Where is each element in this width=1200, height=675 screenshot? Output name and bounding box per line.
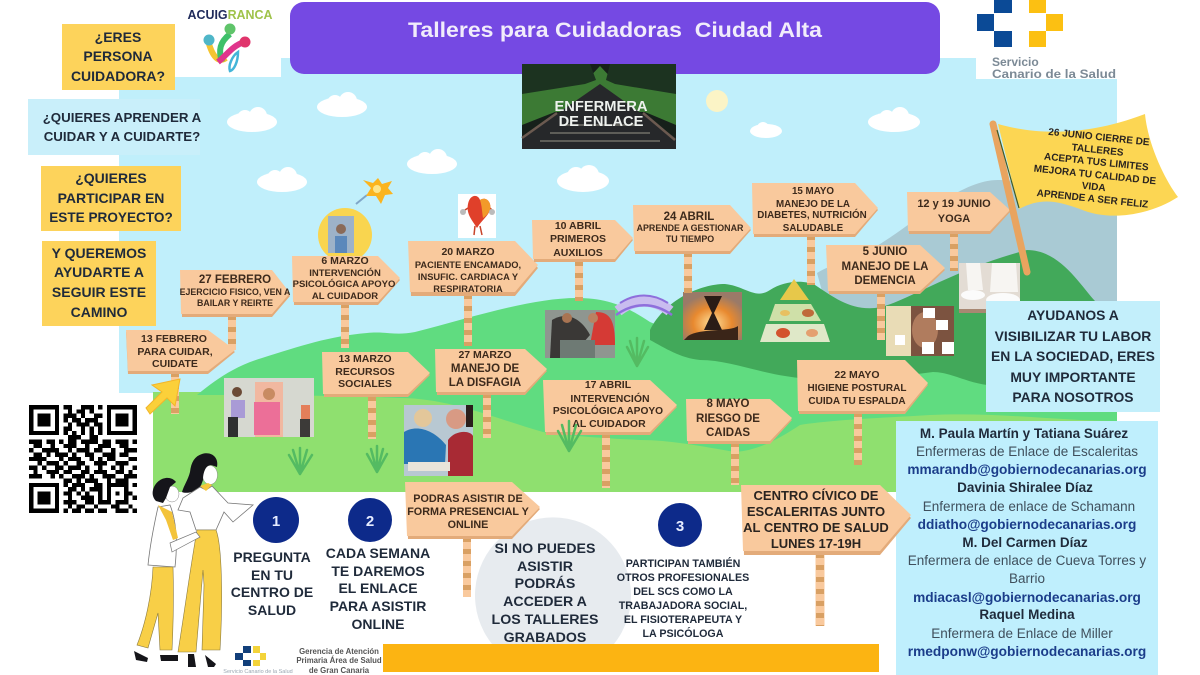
- flag: 26 junio: ACEPTA TUS LIMITES: [1043, 152, 1149, 174]
- step 3: number badge and text: PARTICIPAN TAMBIÉN: [626, 557, 740, 570]
- signpost: 13 marzo: RECURSOS: [335, 366, 395, 378]
- signpost: podras asistir: ONLINE: [448, 519, 488, 531]
- signpost: 5 junio: [826, 245, 945, 340]
- panel: visibilizar: EN LA SOCIEDAD, ERES: [991, 348, 1155, 364]
- signpost: 8 mayo: [686, 398, 792, 485]
- step 3: number badge and text: DEL SCS COMO LA: [633, 586, 733, 598]
- step 2: number badge and text: [326, 498, 430, 632]
- question box: queremos ayudarte: [42, 241, 156, 326]
- arrow: yellow start arrow: [146, 379, 180, 414]
- signpost: 24 abril: APRENDE A GESTIONAR: [637, 223, 744, 233]
- panel: contacts: M. Del Carmen Díaz: [962, 535, 1088, 550]
- signpost: 20 marzo: RESPIRATORIA: [433, 284, 503, 294]
- icon: brain burst above sign: [318, 178, 393, 262]
- step 1: number badge and text: SALUD: [248, 602, 296, 618]
- signpost: 27 febrero: 27 FEBRERO: [199, 274, 271, 286]
- step 2: number badge and text: ONLINE: [352, 616, 404, 632]
- logo: Servicio Canario de la Salud: Servicio: [992, 55, 1039, 69]
- step 1: number badge and text: EN TU: [251, 567, 293, 583]
- text: gerencia de atencion primaria: [296, 647, 382, 675]
- grey circle with recorded workshops text: SI NO PUEDES: [495, 541, 595, 557]
- logo: Servicio Canario de la Salud: Canario de la Salud: [992, 67, 1116, 81]
- signpost: 15 mayo: [752, 183, 878, 285]
- panel: contacts: rmedponw@gobiernodecanarias.org: [908, 644, 1146, 659]
- signpost: podras asistir: [405, 482, 540, 597]
- signpost: centro civico: ESCALERITAS JUNTO: [747, 504, 885, 519]
- bridge: [616, 296, 672, 315]
- step 3: number badge and text: LA PSICÓLOGA: [643, 627, 724, 640]
- photo: dance class: [224, 378, 314, 437]
- question box: quieres participar: ESTE PROYECTO?: [49, 210, 173, 225]
- question box: quieres aprender: ¿QUIERES APRENDER A: [43, 110, 202, 125]
- signpost: centro civico: CENTRO CÍVICO DE: [754, 488, 879, 503]
- step 3: number badge and text: [617, 503, 749, 640]
- signpost: podras asistir: PODRAS ASISTIR DE: [413, 493, 523, 505]
- question box: quieres aprender: CUIDAR Y A CUIDARTE?: [44, 129, 200, 144]
- signpost: 8 mayo: CAIDAS: [706, 427, 750, 439]
- panel: contacts: mmarandb@gobiernodecanarias.org: [907, 462, 1147, 477]
- signpost: centro civico: [741, 485, 911, 626]
- panel: contacts: Enfermera de enlace de Schamann: [923, 499, 1135, 514]
- panel: contacts: [896, 421, 1158, 675]
- flag: 26 junio: APRENDE A SER FELIZ: [1036, 188, 1149, 211]
- panel: visibilizar: VISIBILIZAR TU LABOR: [995, 328, 1151, 344]
- title banner: [290, 2, 940, 74]
- grey circle with recorded workshops text: ACCEDER A: [503, 594, 587, 610]
- icon: grass plants: [289, 338, 648, 474]
- question box: eres persona cuidadora: PERSONA: [83, 48, 153, 64]
- signpost: 10 abril: PRIMEROS: [550, 233, 606, 245]
- grey circle with recorded workshops text: ASISTIR: [517, 559, 573, 575]
- step 2: number badge and text: TE DAREMOS: [331, 563, 425, 579]
- signpost: 22 mayo: [797, 360, 928, 465]
- signpost: 20 marzo: [408, 241, 538, 346]
- signpost: 13 marzo: [322, 352, 430, 439]
- step 1: number badge and text: PREGUNTA: [233, 549, 311, 565]
- signpost: 27 febrero: BAILAR Y REIRTE: [197, 298, 273, 308]
- clouds: [227, 92, 920, 192]
- flag: 26 junio: 26 JUNIO CIERRE DE: [1048, 127, 1150, 148]
- signpost: 13 febrero: PARA CUIDAR,: [137, 346, 213, 358]
- orange footer bar: [383, 644, 879, 672]
- question box: queremos ayudarte: AYUDARTE A: [54, 264, 144, 280]
- signpost: 22 mayo: CUIDA TU ESPALDA: [808, 396, 906, 407]
- grey circle with recorded workshops text: [475, 517, 631, 646]
- signpost: 15 mayo: DIABETES, NUTRICIÓN: [757, 209, 867, 221]
- signpost: 5 junio: DEMENCIA: [854, 275, 916, 287]
- signpost: 12 y 19 junio: [907, 192, 1010, 271]
- logo: small servicio canario: [223, 646, 293, 675]
- panel: contacts: Davinia Shiralee Díaz: [957, 480, 1093, 495]
- signpost: podras asistir: FORMA PRESENCIAL Y: [407, 506, 530, 518]
- question box: quieres participar: ¿QUIERES: [75, 170, 147, 186]
- step 3: number badge and text: TRABAJADORA SOCIAL,: [619, 600, 747, 612]
- step 2: number badge and text: PARA ASISTIR: [330, 598, 426, 614]
- signpost: 13 febrero: CUIDATE: [152, 358, 198, 370]
- signpost: 17 abril: [543, 379, 677, 488]
- signpost: 15 mayo: SALUDABLE: [783, 223, 844, 234]
- signpost: 17 abril: 17 ABRIL: [585, 379, 632, 391]
- signpost: 6 marzo: INTERVENCIÓN: [309, 267, 381, 279]
- panel: contacts: M. Paula Martín y Tatiana Suárez: [920, 426, 1128, 441]
- grey circle with recorded workshops text: GRABADOS: [504, 630, 586, 646]
- icon: heart character: [458, 194, 496, 238]
- qr code: [29, 405, 137, 513]
- illustration: woman and boy: [134, 453, 253, 667]
- icon: food pyramid: [760, 279, 830, 342]
- signpost: 5 junio: 5 JUNIO: [863, 246, 907, 258]
- signpost: 15 mayo: 15 MAYO: [792, 186, 834, 197]
- flag: 26 junio: TALLERES: [1071, 142, 1124, 159]
- panel: contacts: Enfermeras de Enlace de Escaleritas: [916, 444, 1138, 459]
- photo: enfermera de enlace: DE ENLACE: [559, 114, 644, 130]
- step 1: number badge and text: CENTRO DE: [231, 584, 313, 600]
- step 1: number badge and text: [231, 497, 313, 618]
- sun: [706, 90, 728, 112]
- signpost: 20 marzo: 20 MARZO: [441, 246, 495, 258]
- signpost: 22 mayo: 22 MAYO: [834, 369, 880, 381]
- signpost: 6 marzo: [292, 255, 400, 348]
- step 3: number badge and text: EL FISIOTERAPEUTA Y: [624, 614, 742, 626]
- signpost: 17 abril: PSICOLÓGICA APOYO: [553, 404, 663, 417]
- panel: contacts: Barrio: [1009, 571, 1045, 586]
- photo: yoga: [959, 263, 1020, 313]
- panel: visibilizar: MUY IMPORTANTE: [1010, 369, 1136, 385]
- signpost: 17 abril: INTERVENCIÓN: [570, 392, 650, 405]
- signpost: 20 marzo: INSUFIC. CARDIACA Y: [418, 272, 519, 282]
- signpost: 17 abril: AL CUIDADOR: [572, 418, 646, 430]
- signpost: 12 y 19 junio: 12 y 19 JUNIO: [917, 198, 991, 210]
- signpost: 6 marzo: 6 MARZO: [321, 255, 369, 267]
- step 3: number badge and text: 3: [676, 518, 684, 535]
- question box: quieres aprender: [28, 99, 202, 155]
- step 2: number badge and text: 2: [366, 513, 374, 530]
- logo: Servicio Canario de la Salud: [976, 0, 1117, 81]
- background scene: sky and hills: [119, 58, 1117, 492]
- photo: hourglass: [683, 292, 742, 340]
- signpost: 13 febrero: 13 FEBRERO: [141, 333, 207, 345]
- question box: eres persona cuidadora: CUIDADORA?: [71, 68, 165, 84]
- panel: contacts: Raquel Medina: [979, 607, 1075, 622]
- step 3: number badge and text: OTROS PROFESIONALES: [617, 572, 749, 584]
- photo: enfermera de enlace: ENFERMERA: [554, 99, 648, 115]
- question box: eres persona cuidadora: ¿ERES: [95, 29, 141, 45]
- text: gerencia de atencion primaria: de Gran Canaria: [309, 666, 370, 675]
- signpost: 8 mayo: 8 MAYO: [706, 398, 750, 410]
- flag: 26 junio: MEJORA TU CALIDAD DE: [1033, 164, 1157, 187]
- text: gerencia de atencion primaria: Primaria Área de Salud: [296, 656, 382, 665]
- question box: quieres participar: [41, 166, 181, 231]
- step 2: number badge and text: CADA SEMANA: [326, 545, 430, 561]
- step 2: number badge and text: EL ENLACE: [338, 580, 418, 596]
- signpost: 27 marzo: [435, 349, 547, 438]
- signpost: 24 abril: 24 ABRIL: [664, 211, 714, 223]
- question box: eres persona cuidadora: [62, 24, 175, 90]
- signpost: 13 marzo: SOCIALES: [338, 378, 392, 390]
- panel: contacts: mdiacasl@gobiernodecanarias.org: [913, 590, 1141, 605]
- signpost: 24 abril: TU TIEMPO: [666, 234, 714, 244]
- signpost: 24 abril: [633, 205, 751, 293]
- signpost: 6 marzo: AL CUIDADOR: [312, 291, 378, 302]
- signpost: 10 abril: AUXILIOS: [553, 247, 603, 259]
- panel: contacts: ddiatho@gobiernodecanarias.org: [918, 517, 1136, 532]
- signpost: 27 febrero: [180, 270, 291, 350]
- flag: 26 junio: VIDA: [1081, 181, 1106, 194]
- photo: first aid group: [545, 310, 615, 358]
- panel: visibilizar: [986, 301, 1160, 412]
- signpost: 27 febrero: EJERCICIO FISICO, VEN A: [180, 287, 291, 297]
- signpost: 5 junio: MANEJO DE LA: [842, 261, 928, 273]
- panel: contacts: Enfermera de Enlace de Miller: [931, 626, 1113, 641]
- question box: queremos ayudarte: CAMINO: [71, 304, 127, 320]
- signpost: 12 y 19 junio: YOGA: [938, 213, 970, 225]
- photo: puzzle portrait: [886, 306, 954, 356]
- signpost: 8 mayo: RIESGO DE: [696, 413, 760, 425]
- signpost: centro civico: LUNES 17-19H: [771, 536, 861, 551]
- logo: ACUIGRANCA: [175, 0, 281, 77]
- signpost: 6 marzo: PSICOLÓGICA APOYO: [293, 278, 395, 290]
- title banner: Talleres para Cuidadoras Ciudad Alta: [408, 19, 822, 42]
- grey circle with recorded workshops text: PODRÁS: [515, 575, 575, 592]
- question box: queremos ayudarte: Y QUEREMOS: [52, 245, 146, 261]
- signpost: 27 marzo: 27 MARZO: [458, 349, 512, 361]
- signpost: centro civico: AL CENTRO DE SALUD: [743, 520, 889, 535]
- signpost: 22 mayo: HIGIENE POSTURAL: [808, 383, 906, 394]
- signpost: 13 febrero: [126, 330, 235, 414]
- question box: queremos ayudarte: SEGUIR ESTE: [52, 284, 146, 300]
- photo: caregiver with elderly man: [404, 405, 473, 476]
- signpost: 15 mayo: MANEJO DE LA: [776, 199, 850, 210]
- panel: visibilizar: AYUDANOS A: [1027, 307, 1119, 323]
- step 1: number badge and text: 1: [272, 513, 280, 530]
- grey circle with recorded workshops text: LOS TALLERES: [492, 612, 598, 628]
- panel: contacts: Enfermera de enlace de Cueva Torres y: [908, 553, 1146, 568]
- signpost: 10 abril: 10 ABRIL: [555, 220, 602, 232]
- text: gerencia de atencion primaria: Gerencia de Atención: [299, 647, 379, 656]
- photo: enfermera de enlace: [522, 64, 676, 149]
- signpost: 13 marzo: 13 MARZO: [338, 353, 392, 365]
- panel: visibilizar: PARA NOSOTROS: [1012, 389, 1134, 405]
- signpost: 10 abril: [532, 220, 633, 301]
- question box: quieres participar: PARTICIPAR EN: [58, 190, 164, 206]
- logo: ACUIGRANCA: ACUIGRANCA: [188, 8, 272, 22]
- flag: 26 junio: [993, 114, 1178, 272]
- logo: small servicio canario: Servicio Canario de la Salud: [223, 669, 293, 675]
- signpost: 20 marzo: PACIENTE ENCAMADO,: [415, 260, 521, 270]
- signpost: 27 marzo: LA DISFAGIA: [449, 377, 521, 389]
- signpost: 27 marzo: MANEJO DE: [451, 363, 520, 375]
